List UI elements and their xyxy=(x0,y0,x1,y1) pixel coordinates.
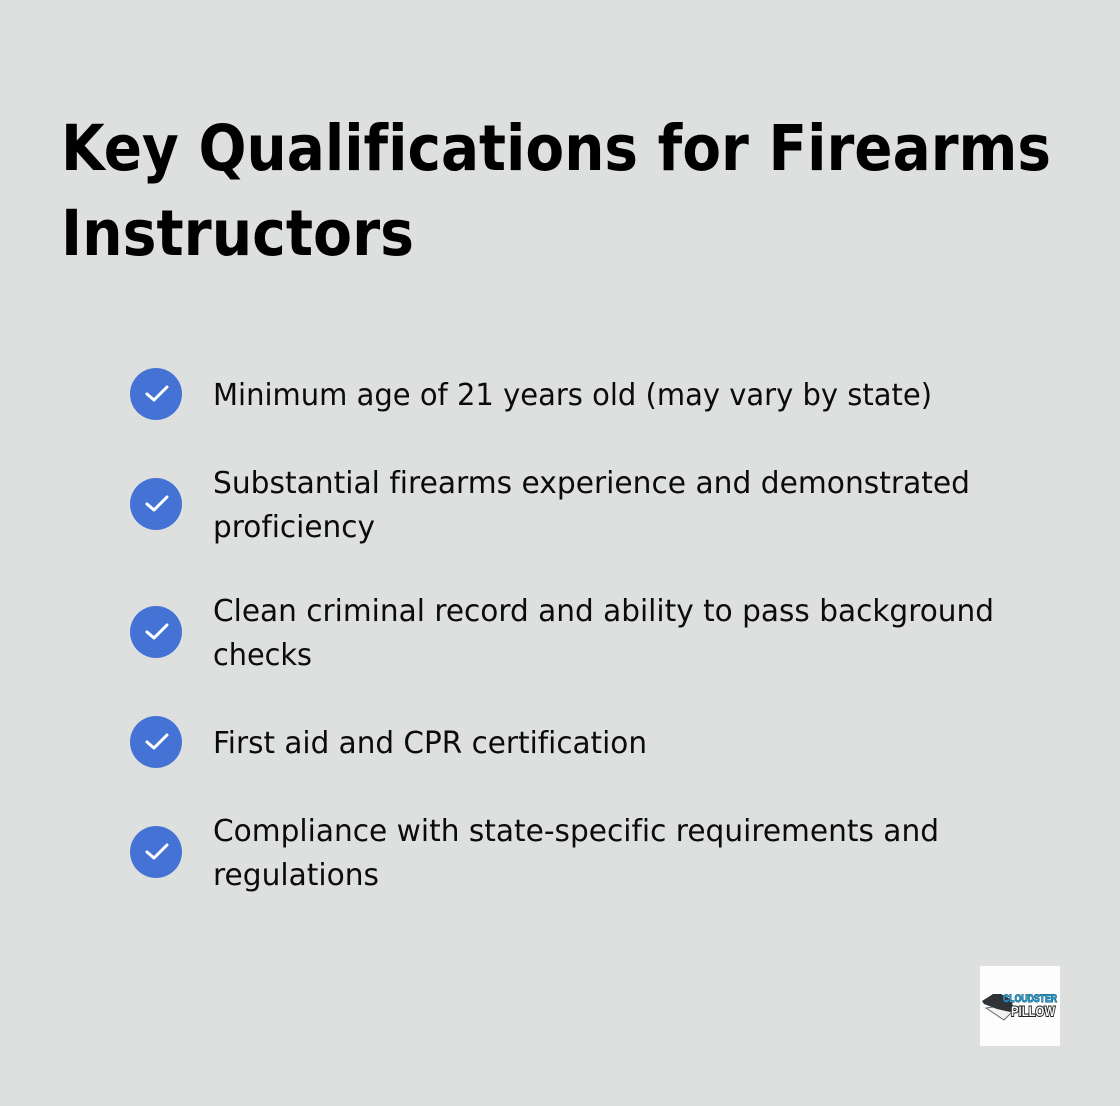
item: criminal record xyxy=(130,594,994,673)
checklist xyxy=(130,368,994,893)
logo wordmark: PILLOW xyxy=(1011,1003,1056,1019)
item: minimum age xyxy=(130,368,932,420)
item: compliance: regulations xyxy=(213,858,379,893)
item: compliance: Compliance with state-specific requirements and xyxy=(213,814,939,849)
item: firearms experience xyxy=(130,466,970,545)
item: firearms experience: Substantial firearms experience and demonstrated xyxy=(213,466,970,501)
item: criminal record: checks xyxy=(213,638,312,673)
item: criminal record: Clean criminal record and ability to pass background xyxy=(213,594,994,629)
title: Instructors xyxy=(61,197,414,270)
logo wordmark: CLOUDSTER xyxy=(1003,993,1057,1005)
logo wordmark xyxy=(1003,993,1057,1019)
title xyxy=(61,112,1051,270)
icon: pillow xyxy=(982,994,1013,1020)
item: first aid: First aid and CPR certification xyxy=(213,726,647,761)
item: minimum age: Minimum age of 21 years old (may vary by state) xyxy=(213,378,932,413)
item: compliance xyxy=(130,814,939,893)
logo: Cloudster Pillow xyxy=(980,966,1060,1046)
item: first aid xyxy=(130,716,647,768)
item: firearms experience: proficiency xyxy=(213,510,375,545)
